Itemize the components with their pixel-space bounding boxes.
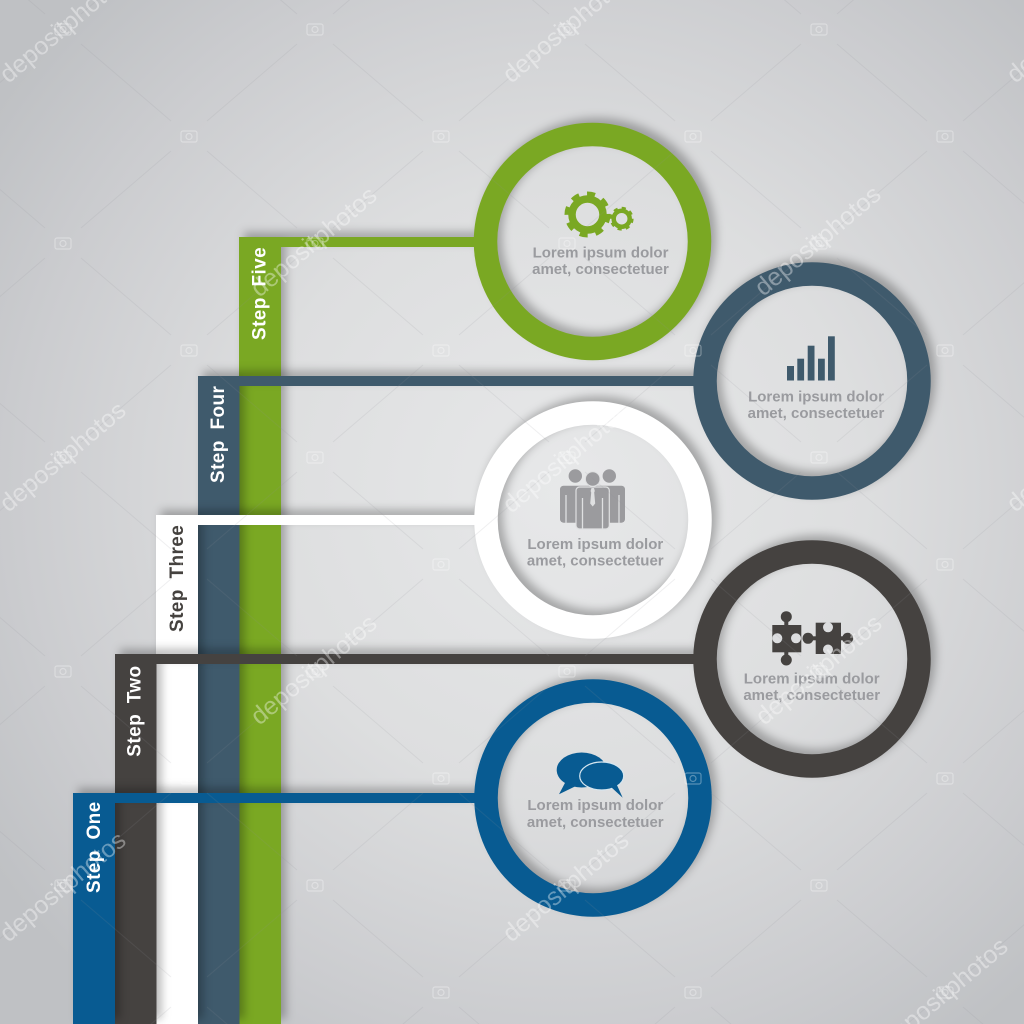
label: step five: Step Five: [250, 247, 270, 340]
blue strip and ring shape: [73, 691, 700, 1024]
watermark text: depositphotos: [749, 180, 886, 302]
watermark text: depositphotos: [245, 609, 382, 731]
text: step two description: amet, consectetuer: [743, 687, 880, 704]
green strip and ring shape: [239, 134, 700, 1024]
text: step two description: Lorem ipsum dolor: [744, 670, 880, 687]
text: step one description: Lorem ipsum dolor: [527, 797, 663, 814]
watermark text: depositphotos: [497, 397, 634, 519]
text: step three description: Lorem ipsum dolor: [527, 536, 663, 553]
step one: blue strip, connector, ring, icon and text: [73, 691, 700, 1024]
text: step four description: Lorem ipsum dolor: [748, 388, 884, 406]
text: step four description: amet, consectetuer: [748, 405, 885, 422]
icon: speech bubbles: [557, 752, 624, 798]
icon: gears: [567, 194, 632, 235]
label: step three: Step Three: [167, 525, 188, 632]
icon: puzzle pieces: [772, 611, 853, 666]
dark strip and ring shape: [115, 552, 919, 1024]
label: step four: Step Four: [208, 386, 229, 483]
step four: slate strip, connector, ring, icon and text: [198, 274, 919, 1024]
step five: green strip, connector, ring, icon and text: [239, 134, 700, 1024]
text: step five description: Lorem ipsum dolor: [533, 245, 668, 262]
label: step two: Step Two: [124, 665, 146, 757]
white strip and ring shape: [156, 413, 700, 1024]
watermark text: depositphotos: [245, 181, 382, 303]
watermark text: depositphotos: [497, 826, 634, 948]
step two: dark strip, connector, ring, icon and text: [115, 552, 919, 1024]
slate strip and ring shape: [198, 274, 919, 1024]
watermark text: depositphotos: [750, 609, 887, 731]
step three: white strip, connector, ring, icon and text: [156, 413, 700, 1024]
text: step five description: amet, consectetuer: [532, 261, 669, 278]
icon: business people: [560, 469, 625, 529]
icon: bar chart: [787, 336, 835, 380]
text: step three description: amet, consectetuer: [527, 553, 664, 570]
text: step one description: amet, consectetuer: [527, 814, 664, 831]
label: step one: Step One: [84, 801, 105, 893]
